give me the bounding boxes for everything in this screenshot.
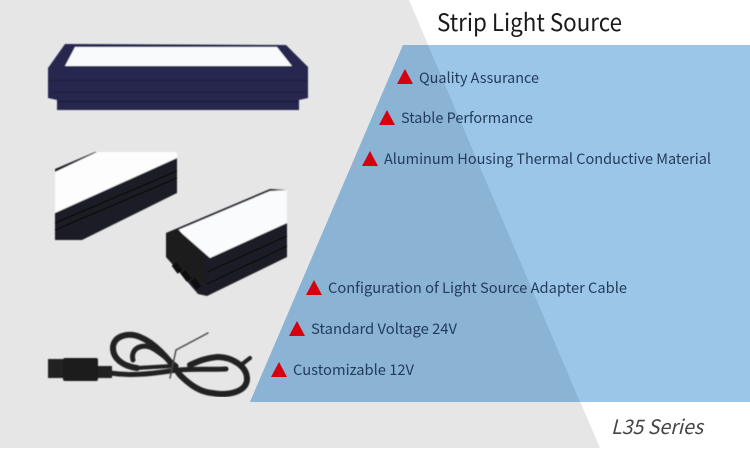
feature: Standard Voltage: Standard Voltage 24V	[311, 318, 458, 339]
panel: blue and grey overlap	[250, 45, 580, 402]
product photo: adapter cable	[48, 333, 250, 394]
product photo: strip light end view	[166, 189, 287, 296]
panel: grey background	[0, 0, 600, 448]
title: Strip Light Source	[437, 3, 622, 38]
series label: L35 Series	[611, 411, 705, 440]
feature: Stable Performance: Stable Performance	[401, 107, 533, 128]
feature: Customizable 12V: Customizable 12V	[293, 359, 415, 380]
feature: Quality Assurance: Quality Assurance	[419, 67, 539, 88]
panel: blue feature area	[250, 45, 750, 402]
feature: Aluminum Housing: Aluminum Housing Thermal Conductive Material	[384, 148, 711, 169]
product photo: full strip light	[48, 44, 308, 110]
feature: Adapter Cable: Configuration of Light Source Adapter Cable	[328, 277, 627, 298]
product photo: strip light close-up	[55, 152, 177, 240]
